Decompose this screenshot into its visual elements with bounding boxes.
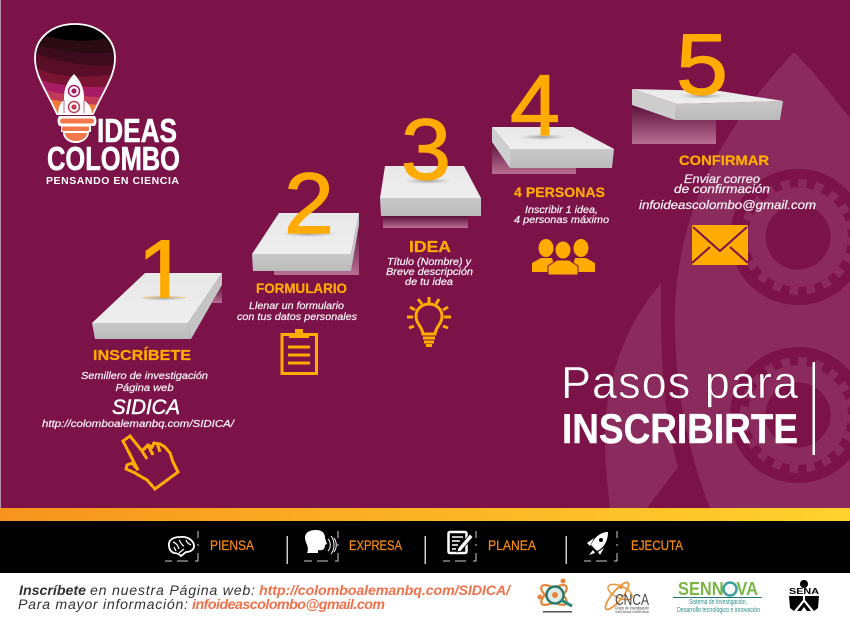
- description: con tus datos personales: [237, 311, 358, 323]
- logo: CNCA: Centro Nacional Colombo Alemán: [615, 610, 649, 614]
- heading: INSCRÍBETE: [93, 347, 191, 364]
- description: [514, 205, 609, 226]
- number 4: 4: [510, 58, 560, 154]
- number 2: 2: [284, 156, 334, 252]
- label: Piensa: PIENSA: [210, 537, 255, 553]
- step 5: Confirmar: [632, 17, 816, 265]
- separator and notepad icon: [424, 531, 476, 564]
- separator and speaking head icon: [286, 530, 338, 564]
- description: Semillero de investigación: [81, 370, 208, 382]
- logo: Sennova: [673, 579, 762, 614]
- description: 4 personas máximo: [514, 215, 609, 226]
- description: http://colomboalemanbq.com/SIDICA/: [42, 418, 235, 430]
- step 4: 4 personas: [492, 58, 614, 275]
- black motto bar: [0, 521, 850, 573]
- step 3: Idea: [380, 102, 481, 346]
- logo: semillero atom: [538, 578, 572, 612]
- step 2: Formulario: [237, 156, 359, 374]
- platform 3: [380, 166, 481, 228]
- label: Expresa: EXPRESA: [349, 537, 403, 553]
- icon: three people: [532, 239, 595, 275]
- footer text: infoideascolombo@gmail.com: [192, 597, 385, 613]
- icon: pointing hand: [123, 436, 178, 489]
- heading: IDEA: [409, 239, 451, 256]
- description: Título (Nombre) y: [387, 257, 472, 268]
- heading: FORMULARIO: [256, 281, 347, 296]
- description: [42, 370, 235, 430]
- description: infoideascolombo@gmail.com: [639, 200, 816, 212]
- logo: Sennova: Sistema de Investigación,: [689, 599, 747, 606]
- title: Pasos para inscribirte: INSCRIBIRTE: [562, 405, 798, 452]
- watermark: rocket with gears: [605, 52, 850, 508]
- logo: SENA: SENA: [789, 587, 819, 596]
- icon: clipboard: [282, 329, 316, 374]
- icon: light bulb: [407, 297, 451, 346]
- heading: CONFIRMAR: [679, 152, 769, 168]
- number 1: 1: [137, 220, 189, 325]
- white footer: [0, 573, 850, 624]
- logo: Ideas Colombo: [30, 20, 180, 187]
- footer text: Para mayor información:: [18, 597, 188, 613]
- number 3: 3: [401, 102, 451, 198]
- platform 2: [252, 213, 359, 275]
- footer text: Inscríbete: [19, 583, 86, 599]
- platform 4: [492, 127, 614, 174]
- logo wordmark: [46, 112, 180, 187]
- label: Planea: PLANEA: [488, 537, 537, 553]
- icon: envelope: [692, 225, 748, 265]
- logo wordmark: COLOMBO: [47, 140, 180, 177]
- platform 5: [632, 89, 783, 144]
- footer text: http://colomboalemanbq.com/SIDICA/: [259, 583, 512, 599]
- description: Llenar un formulario: [249, 300, 344, 312]
- title: Pasos para inscribirte: Pasos para: [561, 357, 799, 408]
- description: Inscribir 1 idea,: [525, 205, 598, 216]
- logo: Sennova: SENNOVA: [678, 579, 758, 599]
- description: Página web: [116, 382, 174, 394]
- logo: CNCA: Grupo de Investigación: [615, 606, 649, 610]
- logo wordmark: PENSANDO EN CIENCIA: [46, 175, 179, 187]
- title: Pasos para inscribirte: [561, 357, 815, 455]
- description: Breve descripción: [386, 267, 473, 278]
- separator and rocket icon: [566, 531, 617, 564]
- logo: SENA: [789, 580, 819, 611]
- description: de tu idea: [405, 277, 453, 288]
- description: [237, 300, 358, 323]
- footer text: [18, 583, 512, 613]
- logo: CNCA: [602, 580, 650, 614]
- heading: 4 PERSONAS: [514, 184, 605, 200]
- logo: Sennova: Desarrollo tecnológico e innovación: [677, 607, 760, 614]
- description: de confirmación: [674, 184, 770, 196]
- icon: brain: [165, 531, 198, 561]
- description: [386, 257, 473, 288]
- number 5: 5: [676, 17, 728, 113]
- label: Ejecuta: EJECUTA: [631, 537, 684, 553]
- icon: bulb with rocket: [34, 23, 116, 143]
- orange gradient band: [0, 508, 850, 521]
- logo: CNCA: CNCA: [615, 592, 650, 609]
- description: Enviar correo: [684, 174, 761, 186]
- description: [639, 174, 816, 212]
- step 1: Inscríbete: [42, 220, 235, 489]
- platform 1: [92, 273, 222, 339]
- logo wordmark: IDEAS: [97, 112, 177, 149]
- footer text: en nuestra Página web:: [90, 583, 255, 599]
- description: SIDICA: [112, 396, 180, 419]
